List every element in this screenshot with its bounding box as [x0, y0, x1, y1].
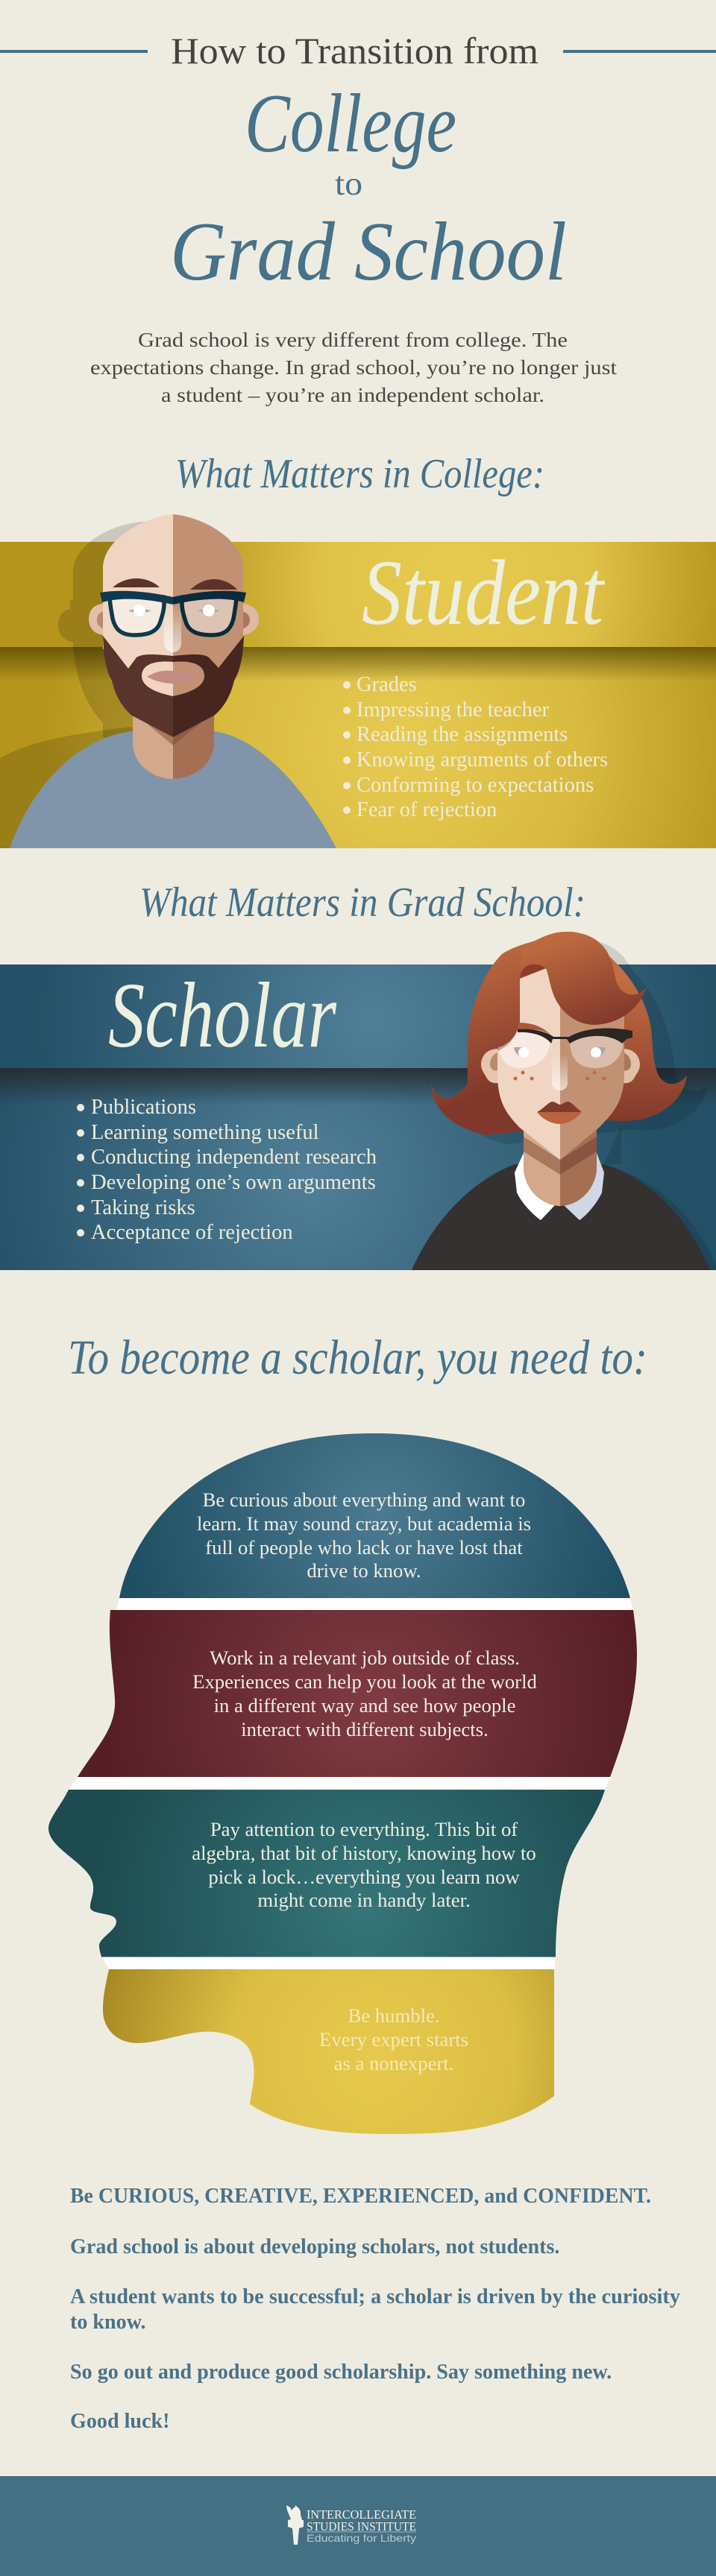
logo: wordmark: INTERCOLLEGIATE: [307, 2507, 416, 2522]
title block: College: [245, 78, 456, 170]
title block: Grad School: [170, 206, 567, 298]
scholar list: Conducting independent research: [91, 1146, 377, 1169]
segment: be humble: [103, 1969, 554, 2134]
student list: Fear of rejection: [357, 798, 497, 821]
ears: [481, 1049, 498, 1083]
closing text: So go out and produce good scholarship. Say something new.: [70, 2361, 612, 2384]
title block: [0, 30, 716, 298]
hair front swoop: [520, 932, 647, 1025]
student list: Knowing arguments of others: [357, 748, 608, 771]
scholar list: Acceptance of rejection: [91, 1221, 293, 1244]
glasses frame: [518, 1028, 632, 1044]
student list: Reading the assignments: [357, 723, 568, 746]
student list: Grades: [357, 673, 417, 696]
neck: [524, 1126, 560, 1206]
segment: pay attention: pick a lock…everything you learn now: [208, 1866, 520, 1888]
freckles: [513, 1070, 606, 1081]
scholar band background: [0, 965, 716, 1270]
closing text: [70, 2185, 680, 2433]
heading: what matters in grad school: What Matters in Grad School:: [139, 880, 585, 926]
shirt: [10, 731, 336, 848]
shadow: [452, 941, 716, 1270]
neck: [133, 716, 173, 779]
segment: be humble: Be humble.: [348, 2004, 440, 2027]
scholar list: Learning something useful: [91, 1121, 319, 1144]
head diagram: [48, 1433, 637, 2134]
footer band: [0, 2476, 716, 2576]
sweater: [412, 1164, 710, 1270]
lips: [537, 1102, 582, 1112]
closing text: Good luck!: [70, 2410, 169, 2433]
segment: relevant job: Work in a relevant job outside of class.: [210, 1647, 520, 1669]
closing text: Grad school is about developing scholars, not students.: [70, 2235, 559, 2258]
nose: [552, 1056, 568, 1090]
face: [497, 968, 560, 1160]
segment: be curious: learn. It may sound crazy, but academia is: [197, 1512, 531, 1535]
segment: pay attention: [48, 1790, 605, 1957]
lips: [147, 671, 196, 684]
intro text: a student – you’re an independent scholar.: [161, 384, 544, 406]
eyes: [128, 609, 151, 613]
title block: to: [335, 165, 362, 202]
segment: be curious: Be curious about everything and want to: [203, 1489, 525, 1511]
intro text: Grad school is very different from college. The: [138, 329, 568, 351]
segment: relevant job: interact with different subjects.: [241, 1718, 489, 1740]
scholar label: Scholar: [108, 965, 337, 1067]
segment: be curious: drive to know.: [307, 1559, 421, 1582]
lenses: [498, 1030, 550, 1068]
closing text: to know.: [70, 2311, 145, 2334]
segment: pay attention: might come in handy later.: [257, 1889, 471, 1911]
eyebrows: [113, 578, 160, 587]
segment: be humble: as a nonexpert.: [334, 2052, 453, 2074]
panel: student: [0, 514, 716, 848]
closing text: A student wants to be successful; a scholar is driven by the curiosity: [70, 2285, 680, 2308]
illustration: bald bearded student: [0, 514, 336, 848]
ears: [89, 604, 104, 635]
face: [103, 514, 173, 738]
student list: Conforming to expectations: [357, 774, 594, 797]
segment: be humble: Every expert starts: [319, 2028, 468, 2051]
brow: [518, 1023, 550, 1035]
scholar list: Publications: [91, 1096, 196, 1119]
beard: [103, 636, 173, 737]
segment: be curious: [119, 1433, 630, 1598]
segment: relevant job: [78, 1610, 637, 1777]
student list: Impressing the teacher: [357, 698, 549, 722]
closing text: Be CURIOUS, CREATIVE, EXPERIENCED, and CONFIDENT.: [70, 2185, 651, 2208]
mouth area: [142, 662, 173, 696]
logo: wordmark: STUDIES INSTITUTE: [307, 2519, 416, 2534]
student list: [343, 673, 608, 821]
panel: scholar: [0, 932, 716, 1270]
logo: torch: [286, 2505, 304, 2545]
eyes: [514, 1047, 524, 1057]
scholar list: Taking risks: [91, 1196, 195, 1219]
white gaps: [69, 1598, 633, 1969]
collar: [515, 1153, 555, 1220]
scholar list: [77, 1096, 377, 1244]
student band background: [0, 542, 716, 848]
hair back: [431, 932, 612, 1135]
segment: pay attention: Pay attention to everything. This bit of: [210, 1818, 518, 1840]
title block: How to Transition from: [171, 30, 538, 72]
segment: relevant job: Experiences can help you look at the world: [192, 1670, 537, 1693]
nose: [164, 606, 181, 652]
segment: be curious: full of people who lack or have lost that: [205, 1536, 523, 1559]
logo: wordmark: Educating for Liberty: [307, 2532, 416, 2544]
heading: what matters in college: What Matters in College:: [175, 451, 544, 497]
illustration: red-haired scholar: [412, 932, 716, 1270]
intro text: expectations change. In grad school, you’re no longer just: [90, 356, 618, 379]
scholar list: Developing one’s own arguments: [91, 1171, 376, 1194]
logo: wordmark: [307, 2507, 416, 2544]
segment: pay attention: algebra, that bit of history, knowing how to: [192, 1842, 536, 1864]
student label: Student: [362, 542, 606, 645]
glasses: [100, 591, 246, 635]
segment: relevant job: in a different way and see how people: [214, 1694, 515, 1717]
intro text: [90, 329, 618, 406]
